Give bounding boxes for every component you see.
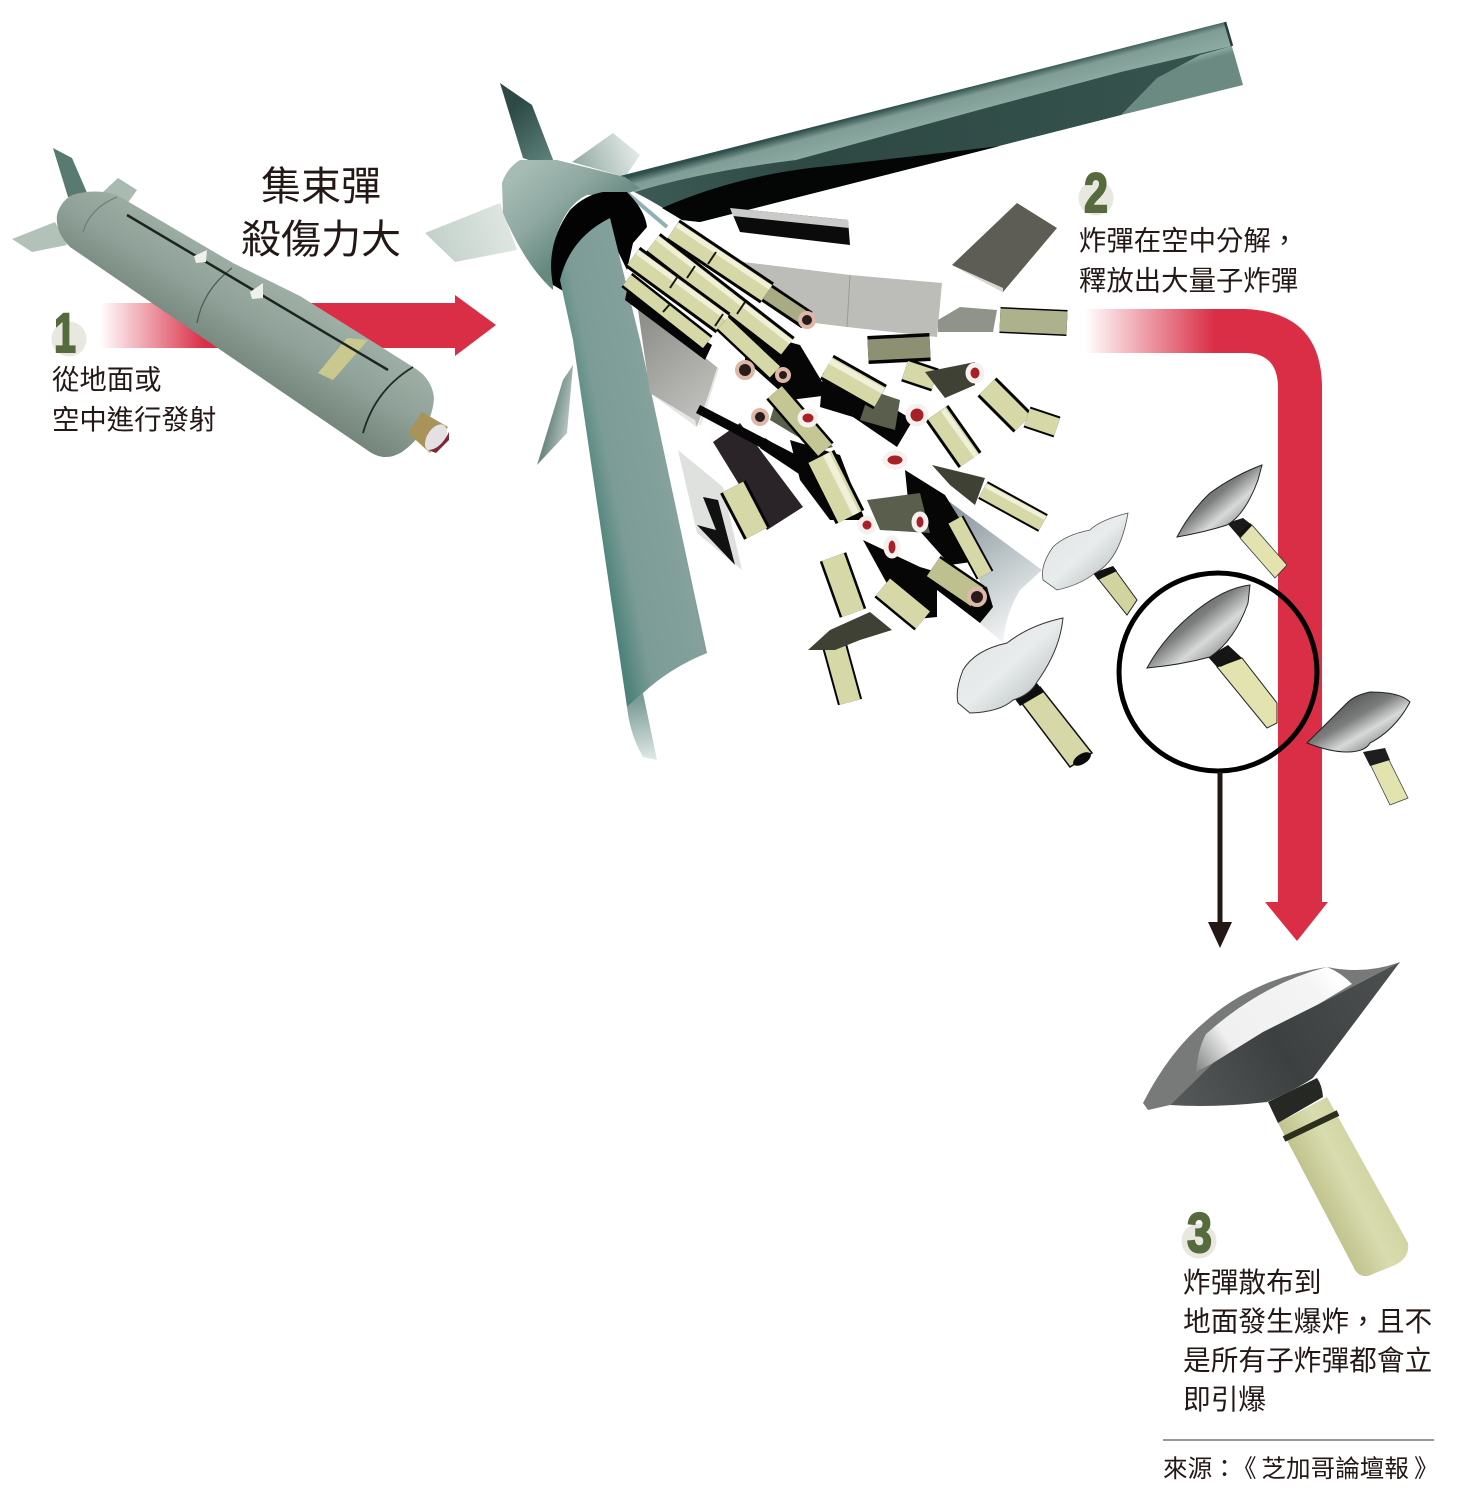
number badge 3: 3	[1187, 1201, 1212, 1264]
step 3 caption	[1182, 1201, 1432, 1415]
lower shell tail	[627, 693, 657, 760]
nose seam	[363, 367, 413, 433]
canopy top	[1143, 962, 1400, 1110]
panel: upper dark plate	[730, 208, 850, 245]
tail seam	[83, 197, 117, 232]
left tail fin	[12, 222, 67, 252]
hub opening ring	[551, 192, 647, 292]
arrow: red launch arrow	[100, 295, 496, 356]
tube	[833, 557, 853, 613]
right tail fin	[103, 178, 137, 204]
step 3 caption: 炸彈散布到	[1183, 1267, 1321, 1298]
tube	[883, 587, 923, 620]
tube	[633, 252, 775, 372]
pink tube ends	[737, 313, 985, 605]
tube	[653, 238, 791, 347]
tube	[987, 387, 1057, 427]
heading: 殺傷力大	[241, 218, 401, 262]
tube	[983, 486, 1045, 523]
illustration: opened bomb casing	[425, 22, 1243, 760]
top shell edge	[1225, 22, 1232, 46]
step 2 caption: 炸彈在空中分解，	[1079, 225, 1298, 256]
top shell shaded underside	[635, 46, 1232, 222]
panel: grey square plate	[952, 203, 1057, 292]
illustration: enlarged submunition	[1143, 962, 1408, 1276]
tube	[833, 640, 850, 702]
submunition: far right	[1307, 692, 1410, 805]
source credit: 來源：《芝加哥論壇報》	[1163, 1455, 1439, 1483]
submunition: inside circle, behind arrow	[1147, 585, 1277, 728]
left fin	[425, 203, 517, 262]
step 1 caption	[52, 301, 216, 435]
number badge 1: 1	[54, 301, 76, 364]
tube	[627, 280, 707, 343]
callout: highlight circle	[1119, 573, 1317, 771]
step 1 caption: 從地面或	[52, 364, 162, 395]
canopy underside	[1148, 962, 1400, 1110]
right fin	[572, 133, 640, 177]
shadow shards in cluster	[625, 290, 993, 623]
arrow: callout pointer	[1208, 772, 1232, 948]
top shell black shadow	[662, 146, 1000, 222]
dark debris right	[797, 362, 985, 660]
tube	[820, 454, 856, 517]
step 2 caption: 釋放出大量子炸彈	[1079, 265, 1298, 296]
panel: side plate	[938, 307, 997, 332]
heading	[241, 165, 401, 262]
panel: light folded plate	[678, 450, 742, 570]
tube	[733, 487, 757, 533]
thin lower fin	[537, 365, 573, 465]
canopy highlight	[1196, 967, 1352, 1072]
dark debris	[770, 387, 930, 533]
tube	[955, 520, 985, 575]
step 3 caption: 即引爆	[1183, 1384, 1266, 1415]
arrow: red dispersal arrow	[1085, 309, 1328, 941]
tube ring	[1284, 1113, 1338, 1139]
step 3 caption: 是所有子炸彈都會立	[1183, 1345, 1432, 1376]
number badge 2: 2	[1084, 161, 1108, 224]
panel: black plate	[713, 423, 803, 530]
tube: central olive	[775, 392, 825, 450]
red fuse caps	[800, 365, 982, 556]
tube	[827, 361, 883, 397]
heading: 集束彈	[261, 165, 381, 209]
top tail fin	[53, 148, 88, 197]
tube: short olive	[868, 347, 930, 350]
panel: left plate	[637, 303, 718, 427]
panel: wide grey plate	[743, 262, 942, 337]
missile body	[57, 192, 434, 457]
tube: horizontal olive	[1000, 320, 1067, 323]
tube	[933, 567, 977, 597]
hub	[502, 160, 640, 290]
slot line	[127, 215, 388, 370]
tube	[673, 225, 807, 320]
slot latches	[194, 250, 263, 299]
middle seam	[197, 268, 232, 323]
submunition: light left	[1042, 513, 1137, 615]
step 3 caption: 地面發生爆炸，且不	[1183, 1306, 1432, 1337]
submunition: large light	[957, 618, 1093, 769]
top casing shell	[620, 22, 1243, 222]
submunition: upper right	[1177, 465, 1287, 578]
collar	[1268, 1078, 1323, 1123]
step 2 caption	[1078, 161, 1298, 296]
tube	[937, 410, 976, 460]
tube: short cream	[905, 370, 935, 380]
step 1 caption: 空中進行發射	[52, 404, 216, 435]
lower casing shell	[560, 218, 707, 707]
illustration: released casing panels and submunitions	[625, 203, 1410, 805]
tube joints	[663, 252, 745, 326]
strut	[627, 193, 667, 227]
top fin	[500, 83, 557, 170]
panel: lower blue plate	[943, 497, 1042, 643]
yellow band	[318, 338, 368, 380]
tube body	[1278, 1097, 1408, 1276]
nose tip	[408, 412, 448, 453]
illustration: intact cluster bomb	[12, 148, 452, 457]
